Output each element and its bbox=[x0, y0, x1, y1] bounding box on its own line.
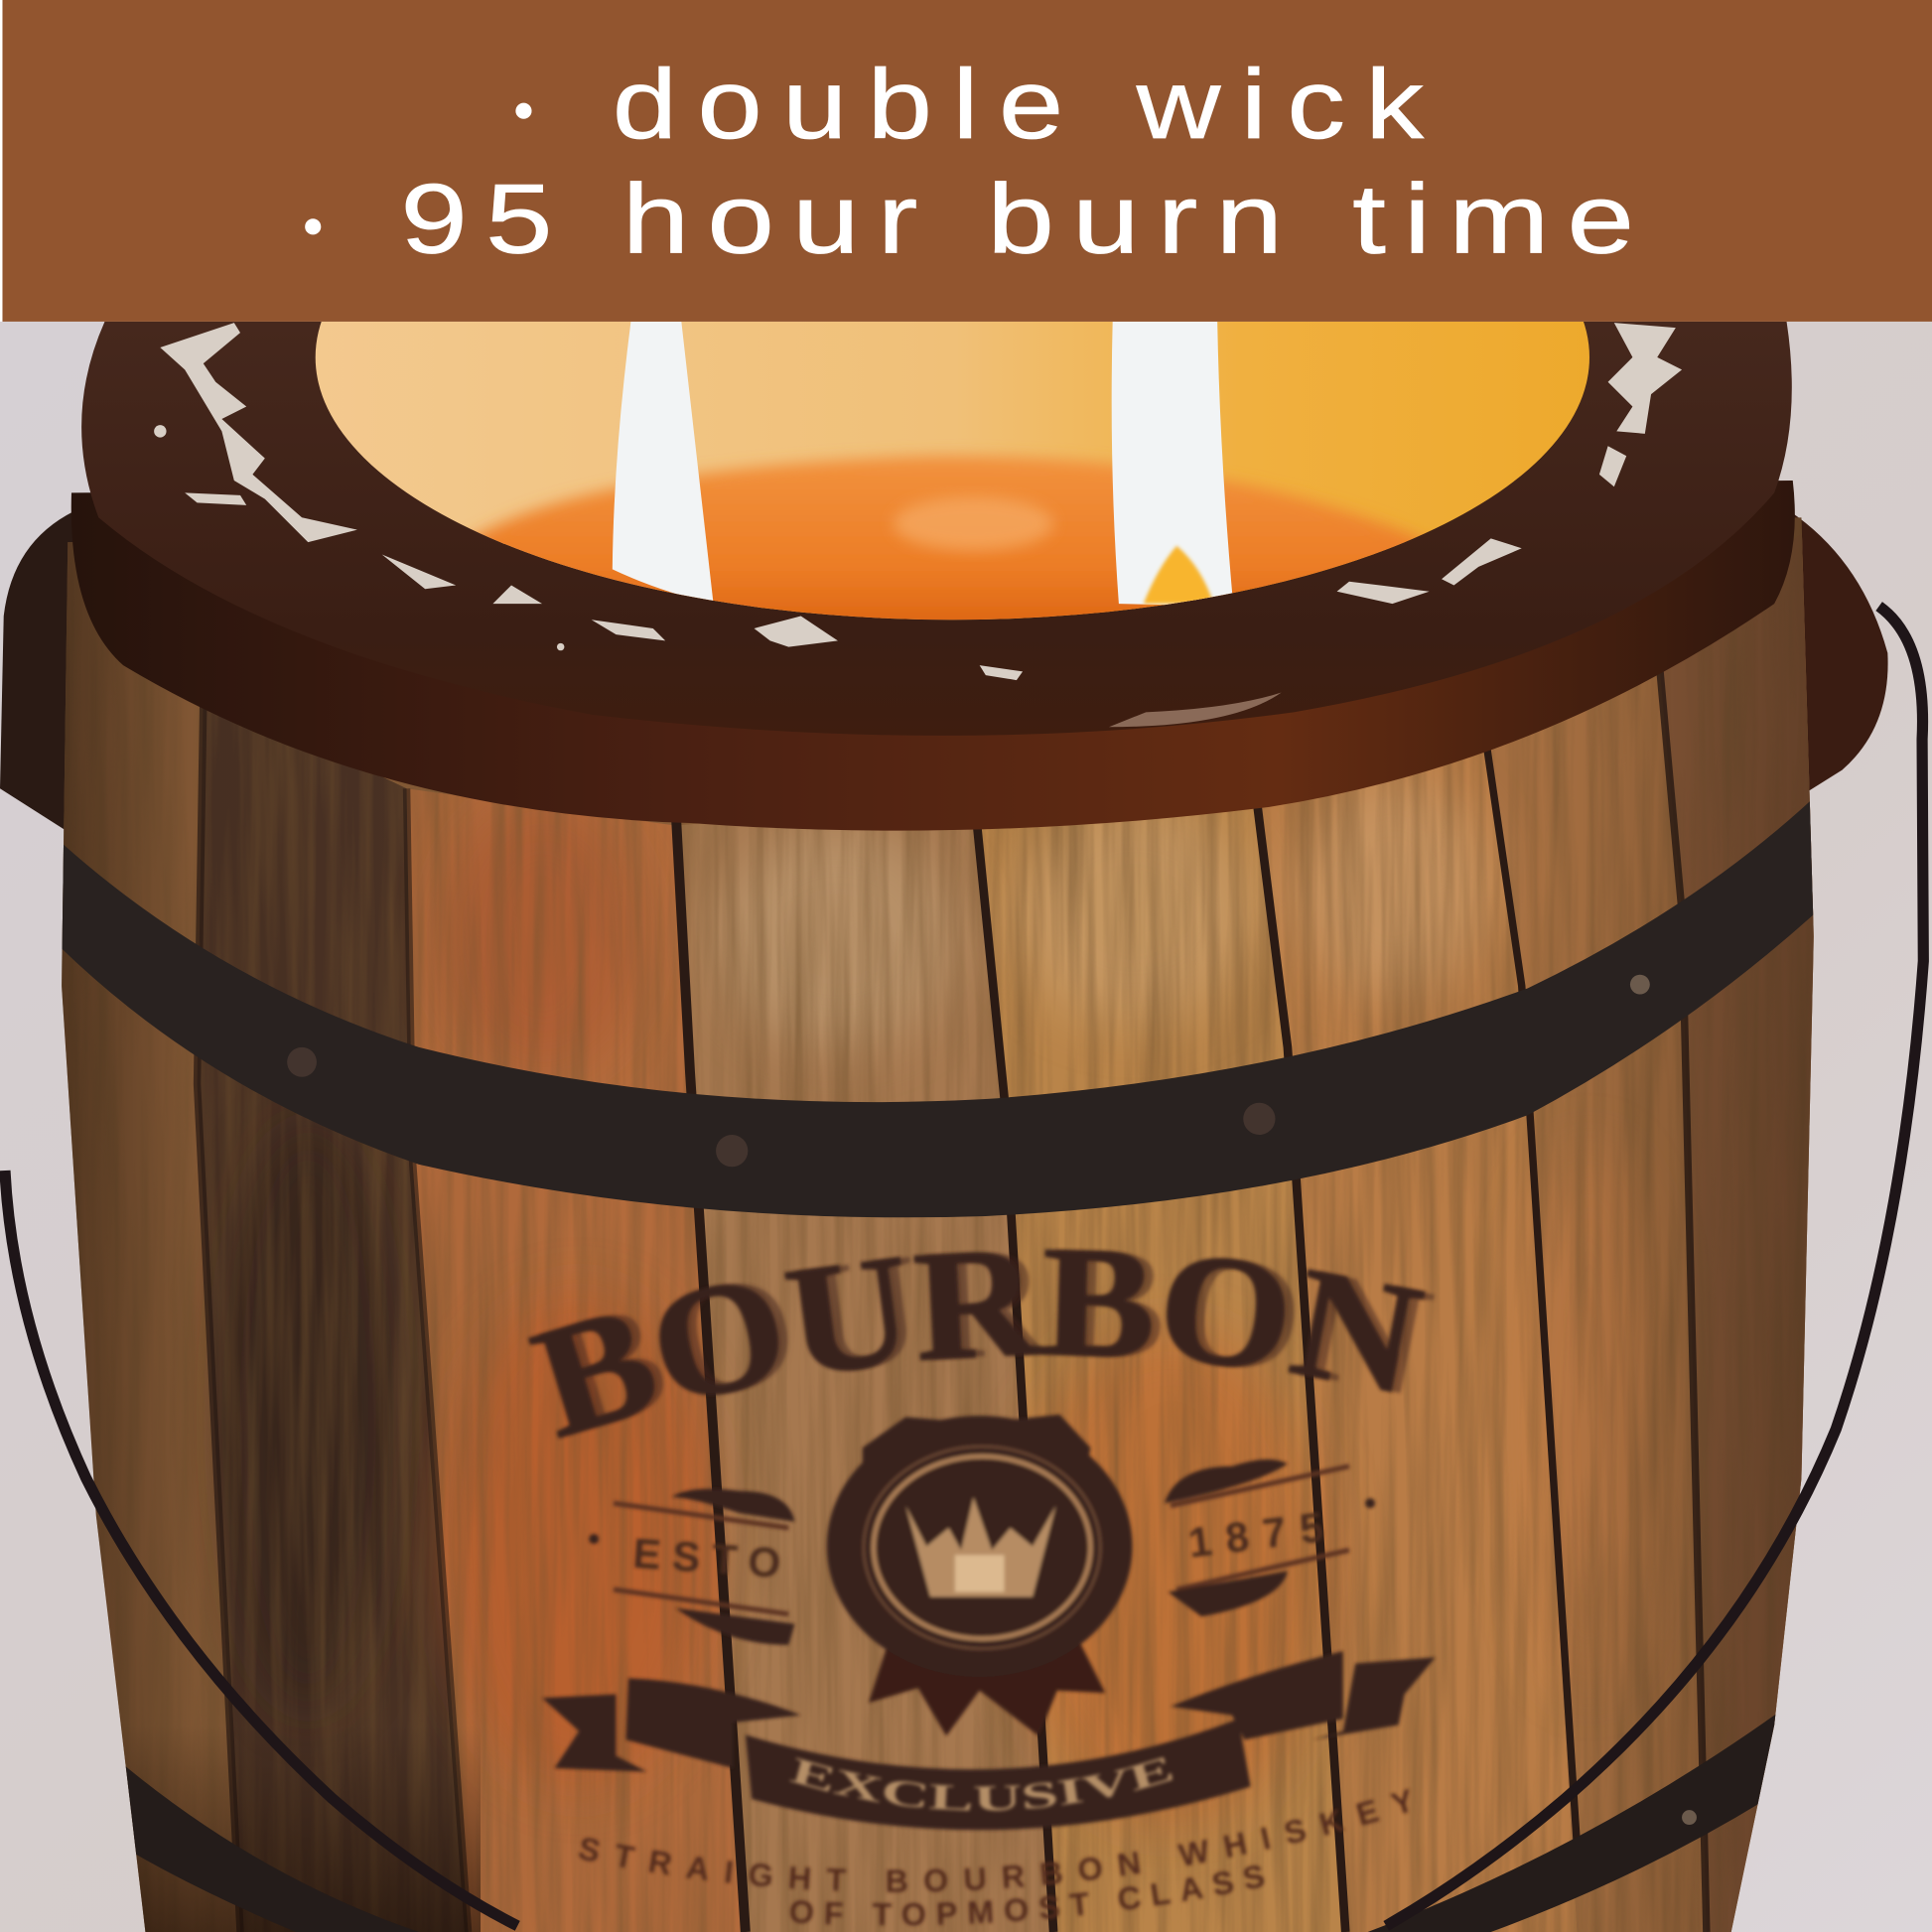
seal bbox=[827, 1415, 1133, 1736]
upper iron hoop bbox=[50, 788, 1824, 1217]
tagline line 2: OF TOPMOST CLASS bbox=[788, 1863, 1267, 1928]
wood grain bbox=[64, 633, 1805, 1932]
ribbon text EXCLUSIVE: EXCLUSIVE bbox=[788, 1755, 1174, 1813]
icon: left ear of the pail bbox=[0, 511, 73, 832]
logo: Bourbon label bbox=[477, 1247, 1483, 1929]
rim top surface bbox=[73, 322, 1792, 736]
inner wall bbox=[308, 322, 1601, 629]
bottom shading bbox=[125, 1744, 481, 1932]
lower iron hoop bbox=[98, 1707, 1787, 1932]
heading: double wick: double wick bbox=[613, 50, 1445, 160]
right ornament and 1875: 1875 bbox=[1185, 1503, 1325, 1567]
wire handle bbox=[5, 607, 1923, 1926]
warm glow patches bbox=[459, 814, 626, 1058]
left ornament and EST bbox=[589, 1489, 794, 1645]
melted wax pool bbox=[456, 456, 1442, 640]
candle opening bbox=[308, 322, 1601, 640]
rim chipped paint bbox=[154, 323, 1682, 680]
heading: 95 hour burn time: 95 hour burn time bbox=[400, 164, 1652, 274]
header bullet line 2 bbox=[305, 218, 321, 234]
tagline line 1: STRAIGHT BOURBON WHISKEY bbox=[578, 1787, 1411, 1894]
collar under the rim bbox=[71, 481, 1795, 831]
flame right bbox=[1112, 322, 1233, 607]
left ornament and EST: ESTO bbox=[631, 1530, 782, 1587]
flame left bbox=[613, 322, 714, 604]
right ornament and 1875 bbox=[1165, 1459, 1375, 1616]
header band bbox=[2, 0, 1932, 322]
flame core bbox=[1144, 546, 1213, 604]
edge shading bbox=[50, 492, 1824, 1932]
barrel body bbox=[62, 517, 1814, 1932]
barrel planks bbox=[62, 517, 1814, 1932]
wax highlights bbox=[894, 496, 1053, 551]
plank seams bbox=[198, 640, 1707, 1932]
handle left section bbox=[5, 1171, 517, 1926]
hoop rivets bbox=[287, 975, 1697, 1825]
handle right section bbox=[1386, 607, 1923, 1926]
ribbon bbox=[542, 1651, 1436, 1830]
collar highlight bbox=[1109, 692, 1282, 727]
crown bbox=[905, 1497, 1056, 1596]
logo word BOURBON shadow: BOURBON bbox=[540, 1249, 1436, 1428]
icon: right ear of the pail bbox=[1780, 505, 1888, 801]
header bullet line 1 bbox=[515, 103, 532, 119]
logo word BOURBON: BOURBON bbox=[526, 1247, 1428, 1441]
